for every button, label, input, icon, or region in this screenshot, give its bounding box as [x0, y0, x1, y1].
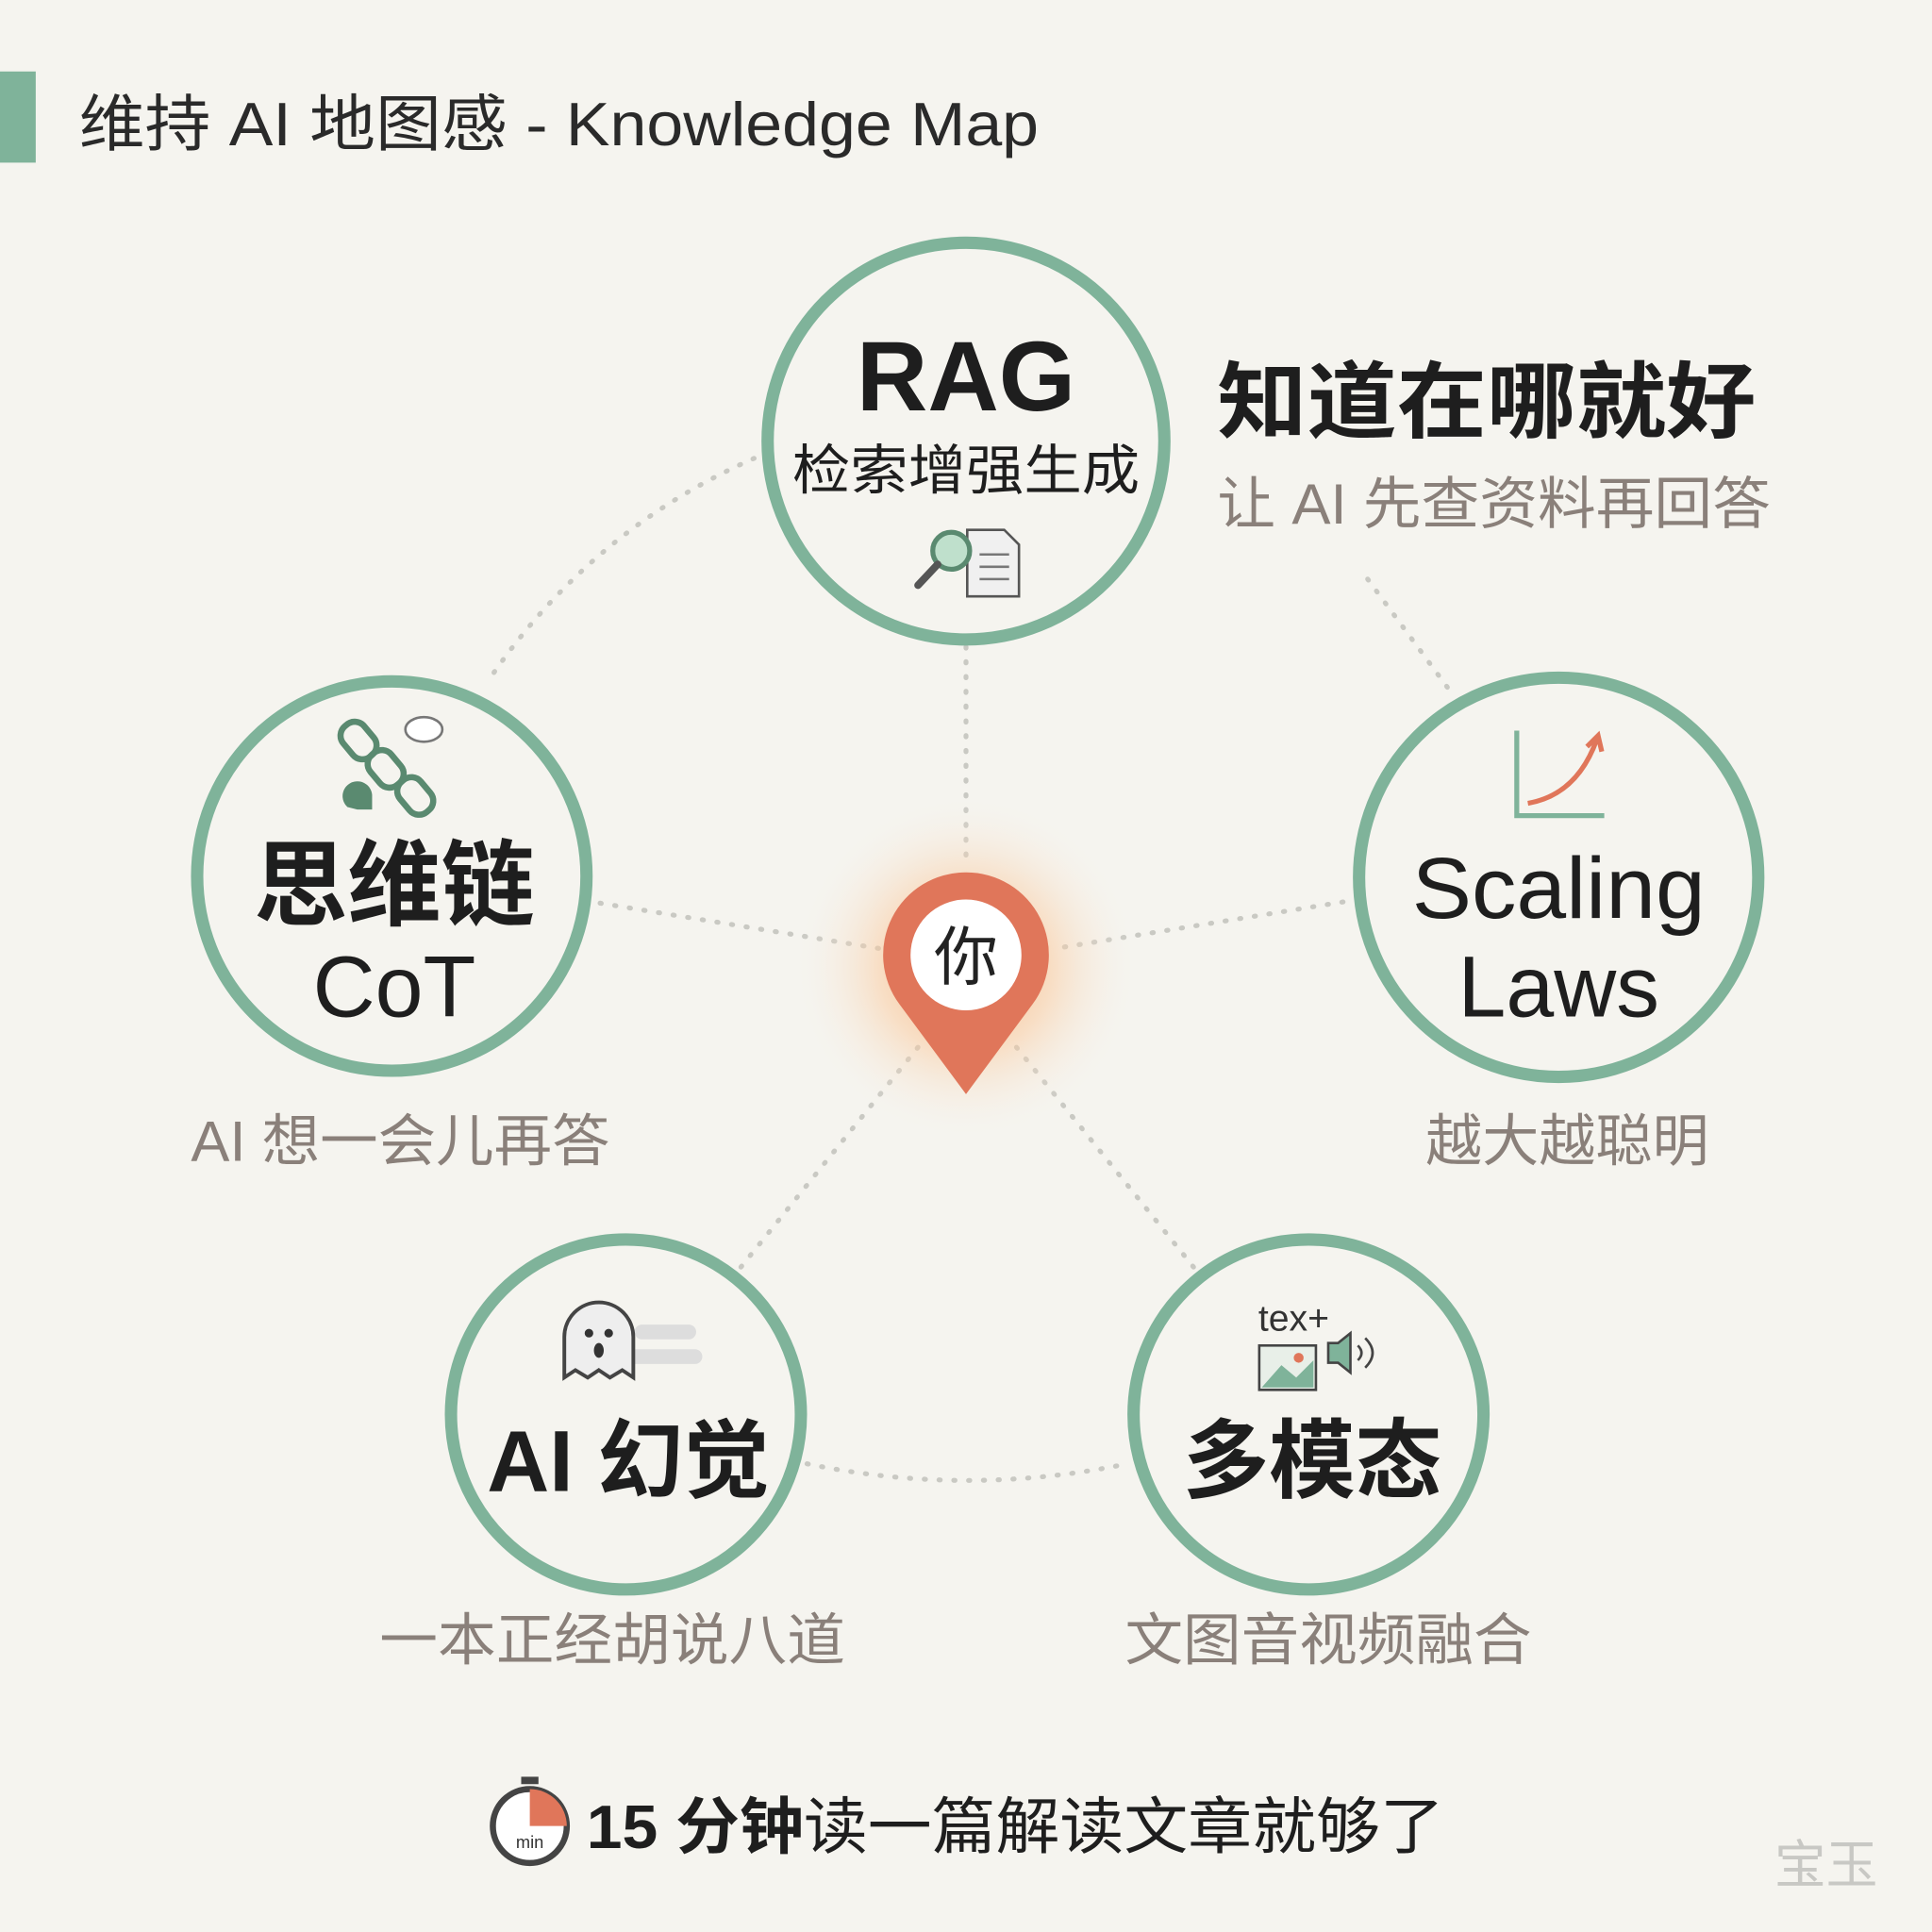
- caption: Scaling: 越大越聪明: [1425, 1109, 1709, 1173]
- node: 多模态: 多模态: [1183, 1413, 1441, 1509]
- glow: [793, 794, 1139, 1140]
- footer: [492, 1776, 1444, 1863]
- icon: timer: [492, 1776, 567, 1863]
- title: 维持 AI 地图感 - Knowledge Map: [79, 90, 1039, 158]
- callout: RAG description: [1217, 356, 1771, 536]
- node: AI 幻觉: AI 幻觉: [487, 1413, 770, 1509]
- caption: multimodal: 文图音视频融合: [1124, 1608, 1532, 1672]
- node: CoT: 思维链: [254, 834, 535, 939]
- callout: RAG description: 知道在哪就好: [1217, 356, 1756, 449]
- node: CoT: CoT: [313, 940, 475, 1036]
- caption: hallucination: 一本正经胡说八道: [379, 1608, 845, 1672]
- caption: CoT: AI 想一会儿再答: [191, 1109, 610, 1173]
- node: Scaling Laws: [1359, 677, 1758, 1077]
- node: RAG: RAG: [857, 322, 1075, 432]
- node: CoT: [197, 681, 587, 1071]
- pin: 你: [883, 873, 1049, 1094]
- node: Scaling Laws: Laws: [1458, 940, 1659, 1036]
- node: 多模态: [1134, 1240, 1484, 1590]
- icon: text image audio: [1258, 1299, 1373, 1390]
- callout: RAG description: 让 AI 先查资料再回答: [1217, 473, 1771, 536]
- node: AI 幻觉: [451, 1240, 801, 1590]
- pin: 你: 你: [934, 923, 998, 993]
- icon: text image audio: tex+: [1258, 1299, 1329, 1340]
- node: Scaling Laws: Scaling: [1412, 841, 1706, 937]
- icon: timer: min: [516, 1832, 543, 1852]
- icon: ghost: [564, 1303, 702, 1377]
- icon: chain thought: [336, 717, 442, 820]
- footer: 15 分钟读一篇解读文章就够了: [587, 1792, 1444, 1861]
- dotted connectors: [491, 458, 1454, 1480]
- icon: search document: [918, 530, 1019, 596]
- signature: 宝玉: [1774, 1836, 1878, 1894]
- icon: growth chart: [1517, 731, 1605, 816]
- node: RAG: [768, 242, 1164, 640]
- title: [0, 72, 1039, 162]
- node: RAG: 检索增强生成: [792, 441, 1140, 502]
